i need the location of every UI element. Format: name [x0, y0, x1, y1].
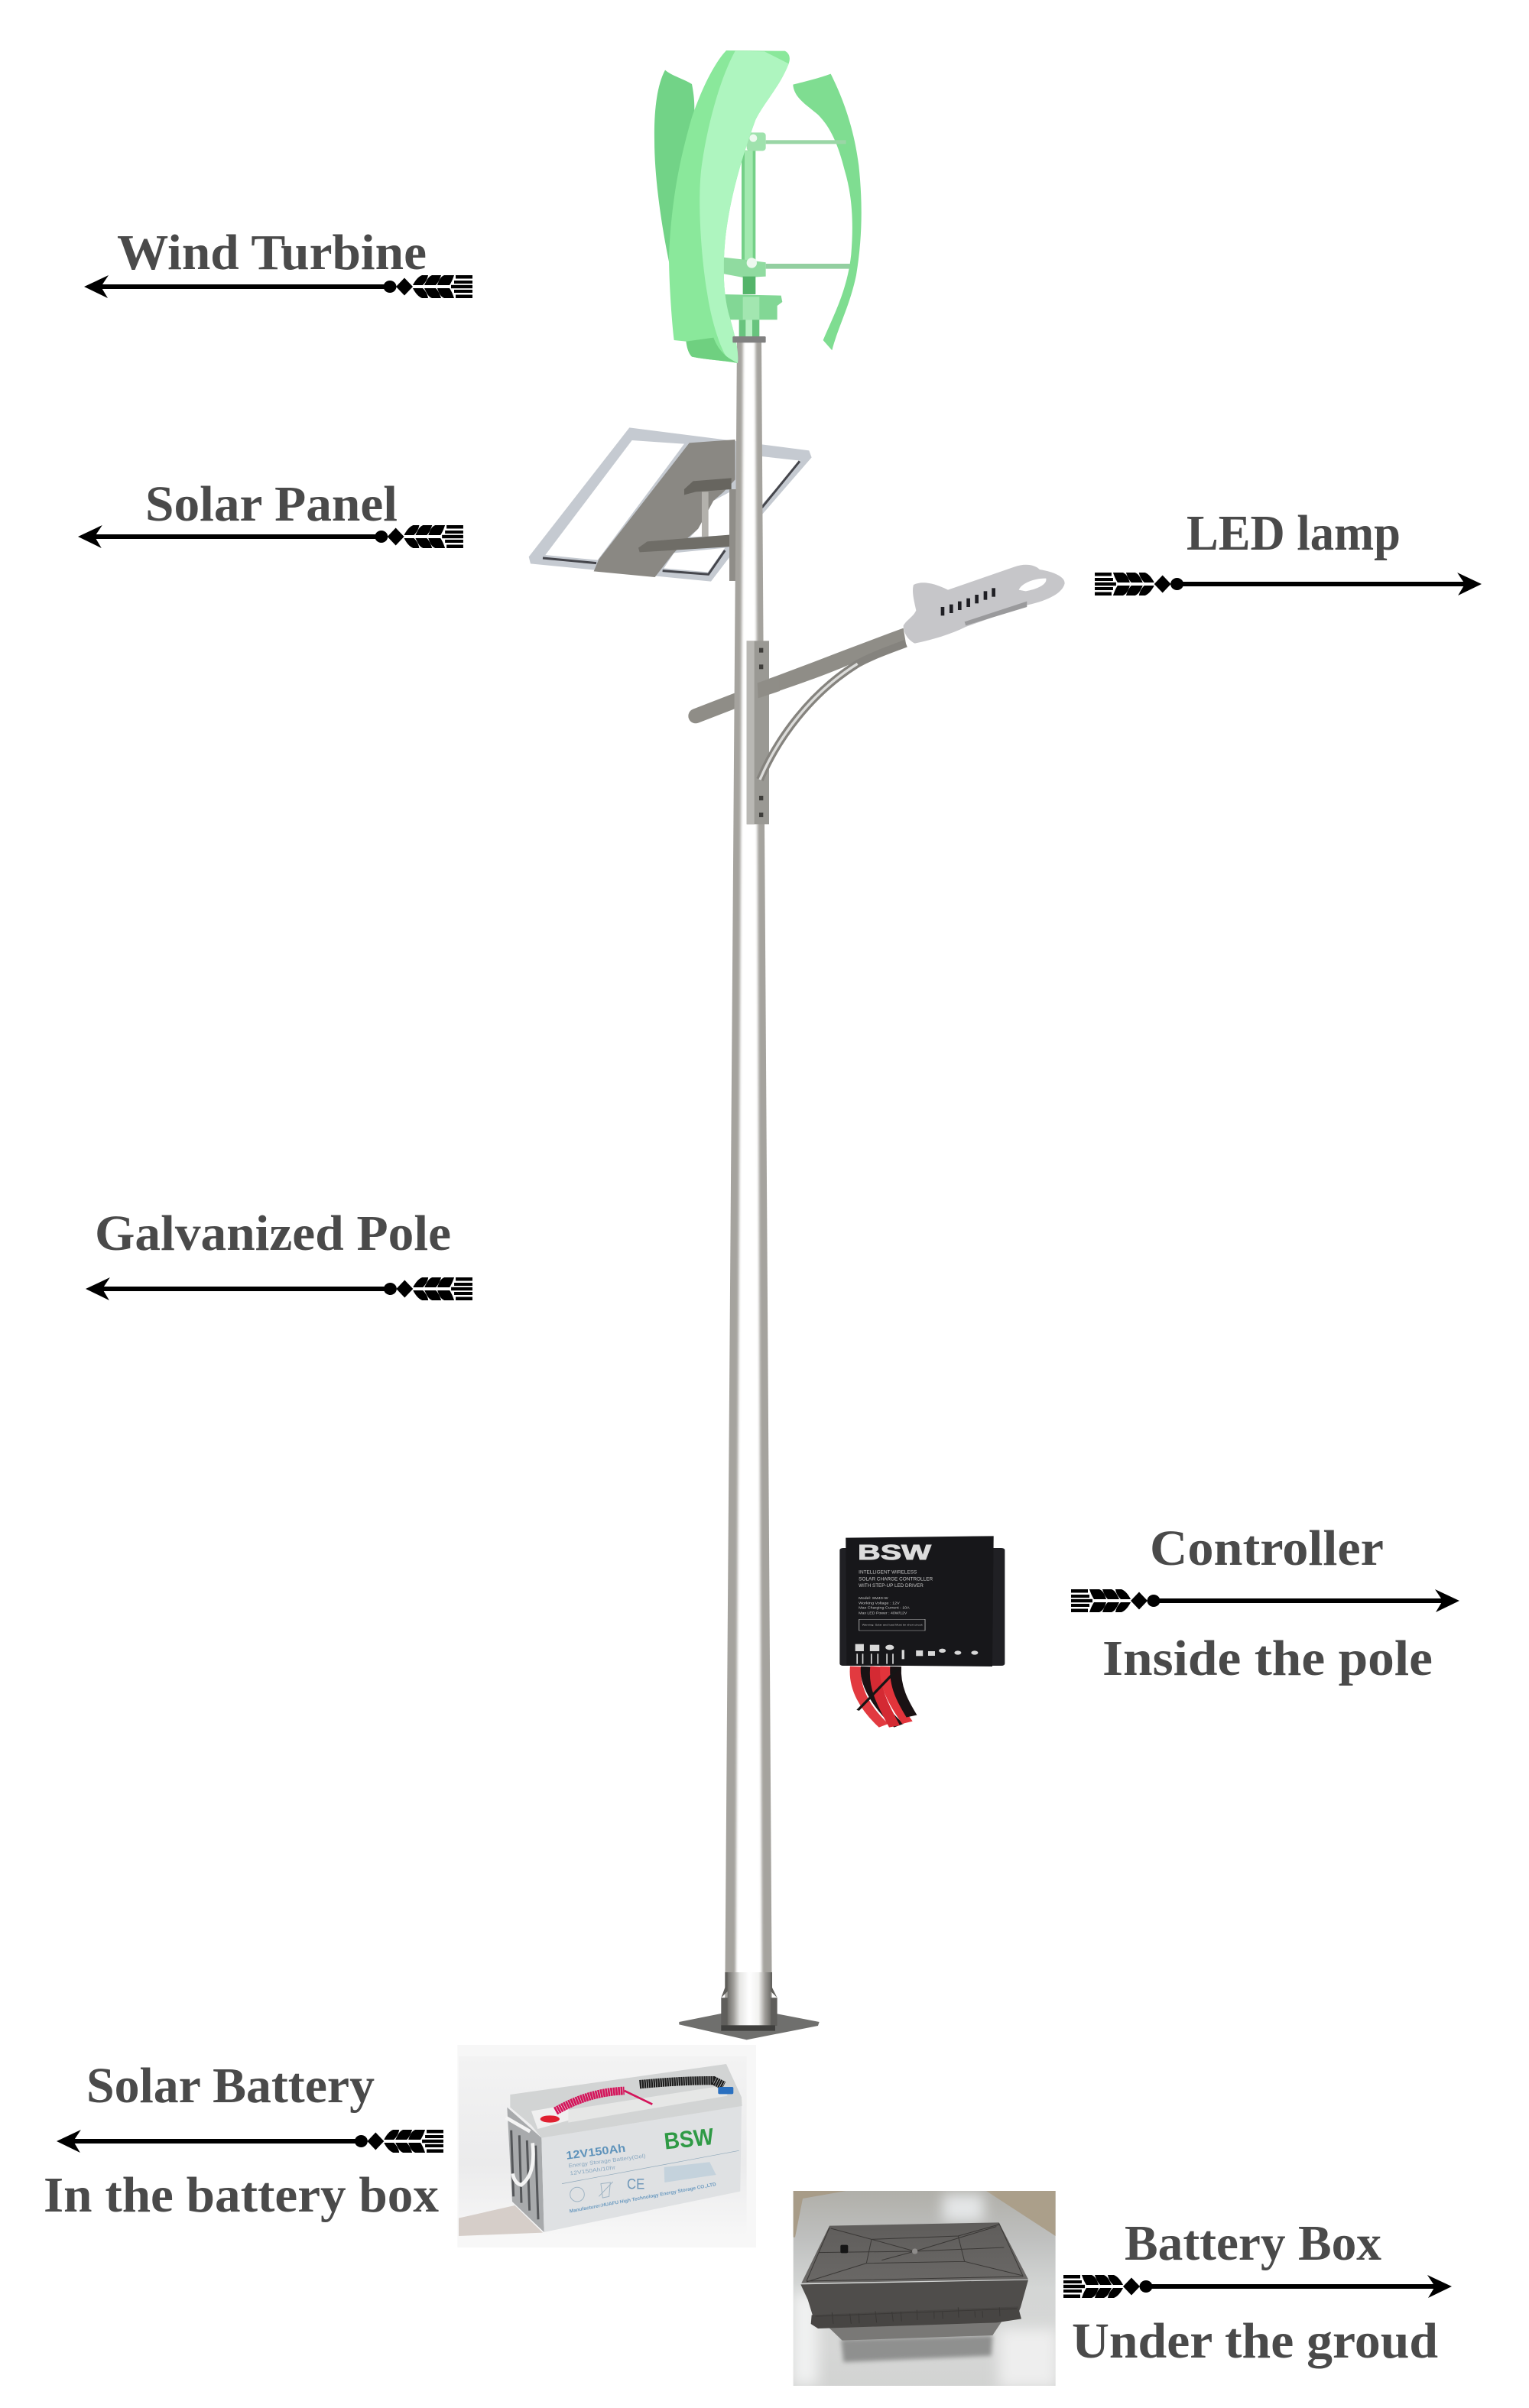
base flanges — [721, 1972, 732, 1997]
arm clamp — [747, 641, 769, 824]
label: battery box: Battery Box — [1125, 2215, 1381, 2271]
box lower body — [828, 2322, 1001, 2341]
generator housing — [722, 294, 782, 320]
controller text — [859, 1569, 933, 1626]
galvanized pole — [725, 339, 772, 2026]
terminal icons — [855, 1644, 978, 1664]
battery shadow — [459, 2205, 543, 2236]
controller text: Max LED Power : 40W/12V — [859, 1612, 907, 1615]
lamp arm — [758, 628, 906, 698]
label: solar panel: Solar Panel — [145, 476, 398, 532]
panel lower glass — [664, 548, 725, 572]
mounting flange — [839, 1548, 1005, 1666]
battery box photo — [793, 2191, 1057, 2387]
blue terminal — [718, 2087, 733, 2094]
controller logo: BSW — [858, 1541, 931, 1564]
controller text: INTELLIGENT WIRELESS — [859, 1569, 917, 1575]
LED lamp and arm — [747, 565, 1065, 824]
label: galvanized pole: Galvanized Pole — [95, 1206, 451, 1261]
lamp lens strip — [965, 602, 1027, 625]
wind turbine — [654, 50, 862, 363]
arrow: LED lamp — [1095, 573, 1482, 596]
right blade — [793, 74, 862, 350]
battery handle — [506, 2118, 534, 2185]
controller text: SOLAR CHARGE CONTROLLER — [859, 1576, 933, 1582]
front blade — [669, 50, 790, 363]
battery CE mark: CE — [627, 2176, 644, 2192]
battery manufacturer line: Manufacturer:HUAFU High Technology Energy Storage CO.,LTD — [569, 2182, 717, 2215]
controller text: Warning: Solar and load Must be short circuit — [862, 1624, 923, 1626]
box top ribs — [807, 2223, 1023, 2324]
solar battery photo — [457, 2045, 756, 2247]
lamp head — [904, 565, 1065, 644]
lamp vents — [941, 588, 995, 615]
arrow: wind turbine — [84, 275, 472, 298]
red cable — [556, 2091, 625, 2111]
controller wires — [855, 1666, 912, 1726]
arrow: battery box — [1063, 2275, 1452, 2298]
lower mounting arm — [638, 534, 732, 552]
arrow: galvanized pole — [86, 1277, 472, 1300]
label: inside the pole: Inside the pole — [1102, 1631, 1433, 1686]
metal sheet highlights — [793, 2194, 1057, 2387]
label: controller: Controller — [1150, 1520, 1384, 1576]
lower spoke — [766, 264, 850, 269]
box top — [801, 2222, 1028, 2283]
battery logo: BSW — [663, 2124, 715, 2155]
curved brace — [760, 644, 906, 780]
box rim — [811, 2306, 1021, 2328]
battery label: 12V150Ah — [566, 2143, 626, 2163]
controller text: Max Charging Current : 10A — [859, 1607, 910, 1610]
mast lower shaft — [743, 277, 755, 294]
box shadow on sheet — [841, 2335, 992, 2362]
upper mounting arm — [684, 478, 732, 495]
background floor corners — [794, 2191, 846, 2238]
upper spoke — [766, 140, 846, 144]
pole foot — [728, 1972, 771, 2026]
lower hub — [724, 258, 766, 277]
battery recycle marks — [570, 2182, 613, 2202]
arrow: solar panel — [78, 525, 463, 548]
battery label — [566, 2140, 647, 2177]
lamp arm rear section — [696, 700, 736, 716]
upper hub — [747, 132, 766, 151]
pole collar — [732, 336, 766, 342]
turbine mast — [742, 151, 755, 260]
box vent post — [840, 2245, 848, 2253]
panel left glass — [545, 440, 684, 560]
blade root shade — [687, 338, 738, 363]
panel bracket — [594, 440, 735, 577]
pole base plate — [679, 1972, 820, 2040]
arrow: solar battery — [57, 2130, 443, 2153]
label: under the ground: Under the groud — [1072, 2313, 1438, 2369]
battery lid — [510, 2064, 742, 2138]
metal sheet background — [794, 2191, 1056, 2386]
battery front — [541, 2106, 742, 2232]
controller body — [846, 1536, 994, 1666]
battery label: 12V150Ah/10hr — [570, 2165, 616, 2176]
label: in the battery box: In the battery box — [44, 2167, 439, 2223]
panel frame — [529, 427, 812, 582]
controller — [839, 1536, 1005, 1726]
label: solar battery: Solar Battery — [86, 2058, 375, 2114]
controller text: Model: SM40-W — [859, 1597, 888, 1600]
controller text: Working Voltage : 12V — [859, 1602, 900, 1605]
solar panel — [529, 427, 812, 582]
battery side — [507, 2108, 544, 2232]
lamp opening — [1019, 579, 1046, 591]
box front — [800, 2280, 1028, 2316]
generator shaft — [739, 320, 759, 338]
battery warning block — [664, 2162, 716, 2182]
arrow: controller — [1071, 1589, 1459, 1612]
lamp arm over clamp — [758, 675, 780, 698]
label: LED lamp: LED lamp — [1187, 505, 1401, 561]
controller text: WITH STEP-UP LED DRIVER — [859, 1582, 924, 1588]
base plate — [679, 2014, 820, 2040]
rear blade left — [654, 70, 694, 268]
front blade highlight — [700, 51, 789, 363]
panel right glass — [759, 456, 800, 508]
label: wind turbine: Wind Turbine — [117, 225, 427, 281]
battery photo background — [457, 2045, 756, 2247]
panel post — [729, 489, 736, 581]
battery label: Energy Storage Battery(Gel) — [568, 2153, 646, 2169]
black cable — [640, 2081, 724, 2085]
clamp bolts — [759, 648, 763, 817]
panel strut — [702, 492, 709, 537]
